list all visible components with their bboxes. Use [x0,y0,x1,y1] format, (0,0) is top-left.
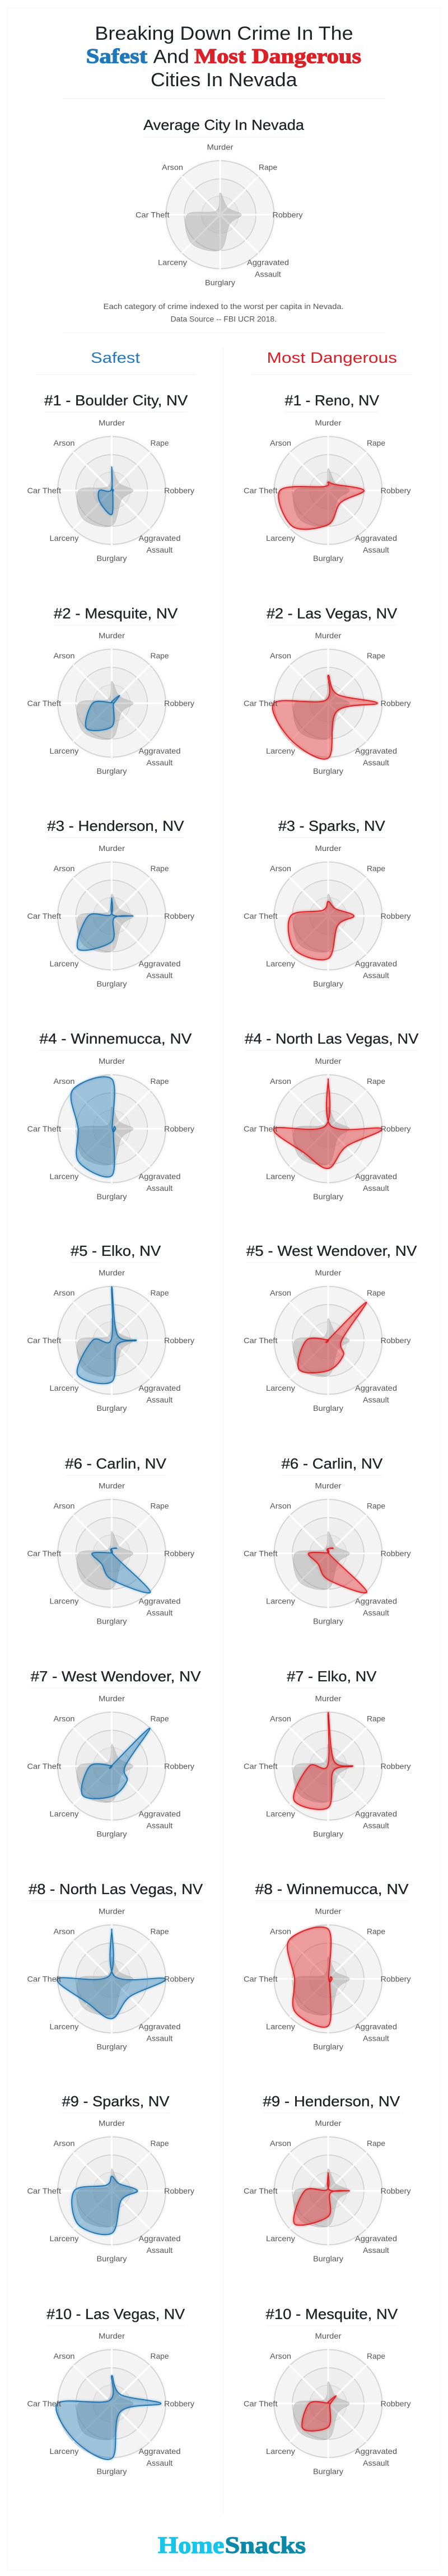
axis labels: Burglary [96,2467,127,2476]
axis labels [27,1907,194,2051]
heading: safest column: Safest [91,349,141,366]
axis labels: Aggravated [139,534,180,543]
axis labels: Murder [315,1907,342,1916]
chart: North Las Vegas [244,1056,411,1201]
axis labels: Rape [259,162,277,171]
axis labels: Burglary [313,1404,343,1413]
logo: HomeSnacks: Home [158,2533,224,2559]
axis labels: Burglary [205,278,235,287]
axis labels [27,631,194,775]
chart: Elko dangerous [244,1694,411,1839]
axis labels: Burglary [313,1830,343,1839]
city shape [92,1548,151,1593]
axis labels: Assault [363,1821,389,1830]
axis labels [27,1694,194,1839]
axis labels: Arson [54,2139,75,2148]
title [86,23,361,91]
axis labels: Robbery [164,1974,194,1983]
axis labels: Car Theft [27,1549,61,1558]
axis labels: Larceny [266,2022,295,2031]
axis labels: Rape [367,1502,385,1511]
city shape [309,1548,367,1593]
axis labels: Larceny [49,1383,78,1392]
axis labels: Murder [99,1268,125,1277]
axis labels: Burglary [96,979,127,988]
note: data source [104,302,344,324]
axis labels: Robbery [381,911,411,920]
axis labels: Robbery [164,1124,194,1133]
axis labels: Murder [99,1907,125,1916]
chart: West Wendover safest [27,1694,194,1839]
axis labels: Robbery [164,699,194,708]
axis labels: Rape [150,1927,169,1936]
axis labels [244,1694,411,1839]
axis labels: Assault [363,545,389,554]
axis labels: Car Theft [244,699,278,708]
axis labels: Robbery [272,211,302,219]
axis labels [244,2119,411,2263]
heading: safest 8: #8 - North Las Vegas, NV [29,1881,203,1897]
axis labels: Assault [147,2246,172,2255]
axis labels: Assault [363,2246,389,2255]
heading: dangerous 10: #10 - Mesquite, NV [265,2306,398,2322]
city shape [287,1927,332,2027]
heading: dangerous 8: #8 - Winnemucca, NV [255,1881,409,1897]
heading: dangerous 2: #2 - Las Vegas, NV [267,605,398,621]
axis labels: Aggravated [355,1597,397,1606]
axis labels: Rape [150,1077,169,1086]
axis labels [244,1907,411,2051]
chart: Mesquite [27,631,194,775]
axis labels: Burglary [96,1830,127,1839]
chart: Carlin safest [27,1481,194,1626]
axis labels: Murder [99,844,125,853]
heading: safest 1: #1 - Boulder City, NV [44,392,188,409]
axis labels: Car Theft [136,211,170,219]
axis labels: Murder [315,1694,342,1703]
axis labels: Aggravated [139,2022,180,2031]
logo: HomeSnacks: Snacks [225,2533,306,2559]
axis labels [27,1056,194,1201]
axis labels: Assault [147,1395,172,1404]
axis labels: Murder [315,1268,342,1277]
heading: dangerous 6: #6 - Carlin, NV [282,1455,383,1472]
heading: dangerous 9: #9 - Henderson, NV [263,2093,400,2110]
axis labels: Larceny [49,534,78,543]
chart: Las Vegas [244,631,411,775]
axis labels: Assault [147,2033,172,2042]
axis labels: Robbery [164,2186,194,2195]
axis labels: Rape [150,2351,169,2360]
axis labels: Arson [54,651,75,660]
axis labels: Car Theft [244,2186,278,2195]
axis labels: Burglary [96,766,127,775]
axis labels: Murder [99,1694,125,1703]
axis labels: Larceny [49,2022,78,2031]
city shape [273,1079,382,1168]
axis labels: Assault [363,1608,389,1617]
axis labels: Car Theft [27,911,61,920]
axis labels: Burglary [313,2254,343,2263]
axis labels: Arson [270,438,291,447]
city shape [77,1287,137,1383]
axis labels: Murder [315,844,342,853]
city shape [98,467,114,515]
axis labels: Larceny [266,1172,295,1181]
axis labels: Rape [367,2351,385,2360]
axis labels: Robbery [164,1549,194,1558]
axis labels: Arson [270,1714,291,1723]
chart: Las Vegas safest [27,2331,194,2476]
axis labels: Murder [315,1481,342,1490]
axis labels: Larceny [49,1597,78,1606]
city shape [81,1728,150,1799]
axis labels: Assault [363,971,389,980]
axis labels: Rape [150,864,169,873]
chart: Henderson dangerous [244,2119,411,2263]
axis labels: Aggravated [139,1383,180,1392]
title: Most Dangerous [194,45,361,68]
axis labels [136,142,302,287]
axis labels [244,1481,411,1626]
axis labels: Larceny [266,746,295,755]
axis labels: Larceny [266,1810,295,1818]
axis labels: Car Theft [244,1124,278,1133]
axis labels: Rape [367,1077,385,1086]
axis labels: Burglary [313,1617,343,1626]
axis labels: Rape [367,1288,385,1297]
axis labels: Car Theft [27,699,61,708]
axis labels [27,1268,194,1413]
axis labels [244,1056,411,1201]
axis labels: Rape [367,864,385,873]
axis labels: Arson [54,1927,75,1936]
heading: dangerous 7: #7 - Elko, NV [287,1668,377,1685]
title: Safest [86,45,148,68]
axis labels: Burglary [313,2042,343,2051]
axis labels: Burglary [96,554,127,563]
axis labels: Aggravated [355,1172,397,1181]
axis labels: Murder [99,1056,125,1065]
heading: safest 6: #6 - Carlin, NV [65,1455,167,1472]
city shape [288,901,354,960]
axis labels: Robbery [381,1336,411,1345]
axis labels: Larceny [266,1383,295,1392]
axis labels: Larceny [49,2447,78,2456]
axis labels: Larceny [49,959,78,968]
axis labels: Arson [270,1927,291,1936]
axis labels: Car Theft [244,486,278,495]
axis labels: Arson [54,864,75,873]
axis labels: Rape [367,1927,385,1936]
axis labels: Assault [147,971,172,980]
axis labels: Car Theft [27,2399,61,2408]
heading: dangerous 4: #4 - North Las Vegas, NV [245,1030,419,1047]
axis labels [244,2331,411,2476]
axis labels: Burglary [96,2042,127,2051]
axis labels: Arson [54,438,75,447]
axis labels: Robbery [381,1974,411,1983]
city shape [273,675,377,759]
axis labels: Arson [270,1288,291,1297]
axis labels: Robbery [381,2186,411,2195]
axis labels: Arson [270,2351,291,2360]
axis labels: Arson [270,2139,291,2148]
axis labels: Aggravated [139,1597,180,1606]
heading: safest 7: #7 - West Wendover, NV [31,1668,201,1685]
axis labels: Arson [270,1502,291,1511]
axis labels: Car Theft [27,2186,61,2195]
chart: Elko [27,1268,194,1413]
axis labels: Larceny [49,1172,78,1181]
heading: safest 10: #10 - Las Vegas, NV [46,2306,185,2322]
axis labels: Larceny [49,746,78,755]
axis labels: Burglary [96,1192,127,1201]
heading: safest 2: #2 - Mesquite, NV [54,605,178,621]
city shape [293,2173,349,2226]
axis labels: Assault [363,2458,389,2467]
chart: Henderson [27,844,194,988]
chart: Winnemucca dangerous [244,1907,411,2051]
axis labels: Aggravated [355,1810,397,1818]
axis labels: Rape [150,1502,169,1511]
axis labels: Arson [54,1714,75,1723]
axis labels: Burglary [96,2254,127,2263]
axis labels: Rape [367,438,385,447]
axis labels: Murder [99,2331,125,2340]
axis labels: Arson [54,1288,75,1297]
axis labels: Larceny [266,534,295,543]
axis labels: Arson [162,162,183,171]
axis labels [244,418,411,563]
axis labels: Aggravated [355,746,397,755]
axis labels: Robbery [381,2399,411,2408]
axis labels: Larceny [158,258,187,267]
axis labels: Aggravated [139,746,180,755]
axis labels: Aggravated [139,959,180,968]
axis labels: Aggravated [139,1172,180,1181]
axis labels: Rape [150,651,169,660]
axis labels: Car Theft [27,1974,61,1983]
axis labels [27,1481,194,1626]
axis labels: Aggravated [139,2447,180,2456]
title: And [153,46,189,67]
axis labels: Robbery [381,1124,411,1133]
axis labels: Rape [367,651,385,660]
axis labels: Robbery [381,699,411,708]
axis labels: Assault [147,1608,172,1617]
axis labels: Larceny [266,2447,295,2456]
axis labels [27,418,194,563]
heading: dangerous 5: #5 - West Wendover, NV [246,1242,417,1259]
city shape [302,2396,336,2431]
title: Breaking Down Crime In The [95,23,353,44]
note: data source: Each category of crime indexed to the worst per capita in Nevada. [104,302,344,311]
axis labels: Murder [315,418,342,427]
axis labels: Assault [363,1395,389,1404]
axis labels: Murder [315,2331,342,2340]
heading: safest 9: #9 - Sparks, NV [62,2093,170,2110]
axis labels: Murder [207,142,234,151]
axis labels: Rape [150,1714,169,1723]
axis labels: Larceny [49,1810,78,1818]
axis labels: Car Theft [244,1761,278,1770]
chart: North Las Vegas safest [27,1907,194,2051]
axis labels: Robbery [164,1761,194,1770]
axis labels: Car Theft [27,1336,61,1345]
axis labels: Car Theft [27,1124,61,1133]
heading: safest 3: #3 - Henderson, NV [47,817,184,834]
axis labels [244,631,411,775]
city shape [77,898,133,951]
axis labels: Assault [363,758,389,767]
axis labels: Robbery [164,1336,194,1345]
axis labels [27,2331,194,2476]
city shape [56,2376,161,2460]
axis labels: Assault [147,545,172,554]
chart: average city radar [136,142,302,287]
axis labels: Aggravated [355,959,397,968]
axis labels: Arson [54,2351,75,2360]
axis labels: Burglary [313,554,343,563]
chart: Mesquite dangerous [244,2331,411,2476]
axis labels: Burglary [313,2467,343,2476]
axis labels: Murder [99,418,125,427]
axis labels: Aggravated [355,534,397,543]
axis labels: Robbery [381,1549,411,1558]
axis labels: Assault [363,1184,389,1193]
axis labels: Robbery [164,911,194,920]
chart: Winnemucca [27,1056,194,1201]
note: data source: Data Source -- FBI UCR 2018. [171,315,277,324]
axis labels: Arson [270,864,291,873]
axis labels: Larceny [49,2234,78,2243]
axis labels: Arson [270,651,291,660]
heading: safest 5: #5 - Elko, NV [71,1242,161,1259]
axis labels: Arson [270,1077,291,1086]
axis labels: Assault [147,758,172,767]
axis labels: Car Theft [27,1761,61,1770]
axis labels: Burglary [96,1617,127,1626]
title: Cities In Nevada [151,69,297,91]
axis labels: Aggravated [139,2234,180,2243]
axis labels: Murder [99,2119,125,2128]
axis labels: Murder [99,631,125,640]
axis labels: Rape [150,1288,169,1297]
axis labels: Rape [367,1714,385,1723]
logo: HomeSnacks [158,2533,306,2559]
heading: dangerous 3: #3 - Sparks, NV [278,817,385,834]
axis labels: Murder [315,631,342,640]
axis labels: Aggravated [355,1383,397,1392]
chart: Carlin dangerous [244,1481,411,1626]
axis labels: Larceny [266,1597,295,1606]
city shape [57,1929,166,2019]
axis labels: Arson [54,1077,75,1086]
heading: average city: Average City In Nevada [143,116,305,133]
axis labels: Car Theft [244,2399,278,2408]
axis labels: Burglary [313,1192,343,1201]
city shape [293,1712,353,1810]
axis labels: Assault [147,2458,172,2467]
axis labels: Car Theft [244,1336,278,1345]
axis labels: Aggravated [139,1810,180,1818]
axis labels: Murder [99,1481,125,1490]
axis labels: Rape [150,438,169,447]
axis labels: Rape [150,2139,169,2148]
axis labels: Assault [147,1821,172,1830]
axis labels [244,1268,411,1413]
axis labels: Murder [315,1056,342,1065]
axis labels: Robbery [381,486,411,495]
city shape [71,1077,116,1177]
axis labels: Assault [363,2033,389,2042]
heading: safest 4: #4 - Winnemucca, NV [39,1030,192,1047]
chart: Reno [244,418,411,563]
heading: dangerous 1: #1 - Reno, NV [285,392,380,409]
city shape [278,482,364,529]
axis labels: Assault [255,270,281,279]
axis labels: Larceny [266,2234,295,2243]
axis labels [27,844,194,988]
city shape [72,2176,138,2234]
chart: Boulder City [27,418,194,563]
axis labels: Car Theft [244,1974,278,1983]
chart: West Wendover [244,1268,411,1413]
chart: Sparks [244,844,411,988]
chart: Sparks safest [27,2119,194,2263]
axis labels: Robbery [164,486,194,495]
heading: most dangerous column: Most Dangerous [267,349,397,366]
axis labels: Car Theft [244,911,278,920]
axis labels: Car Theft [27,486,61,495]
axis labels: Robbery [381,1761,411,1770]
axis labels: Assault [147,1184,172,1193]
axis labels: Arson [54,1502,75,1511]
axis labels: Rape [367,2139,385,2148]
axis labels [27,2119,194,2263]
axis labels: Aggravated [355,2234,397,2243]
axis labels: Aggravated [355,2447,397,2456]
axis labels: Robbery [164,2399,194,2408]
axis labels [244,844,411,988]
city shape [298,1302,366,1373]
axis labels: Murder [315,2119,342,2128]
axis labels: Burglary [313,979,343,988]
city shape [86,695,120,731]
axis labels: Aggravated [355,2022,397,2031]
axis labels: Burglary [96,1404,127,1413]
axis labels: Car Theft [244,1549,278,1558]
axis labels: Burglary [313,766,343,775]
axis labels: Aggravated [247,258,289,267]
axis labels: Larceny [266,959,295,968]
